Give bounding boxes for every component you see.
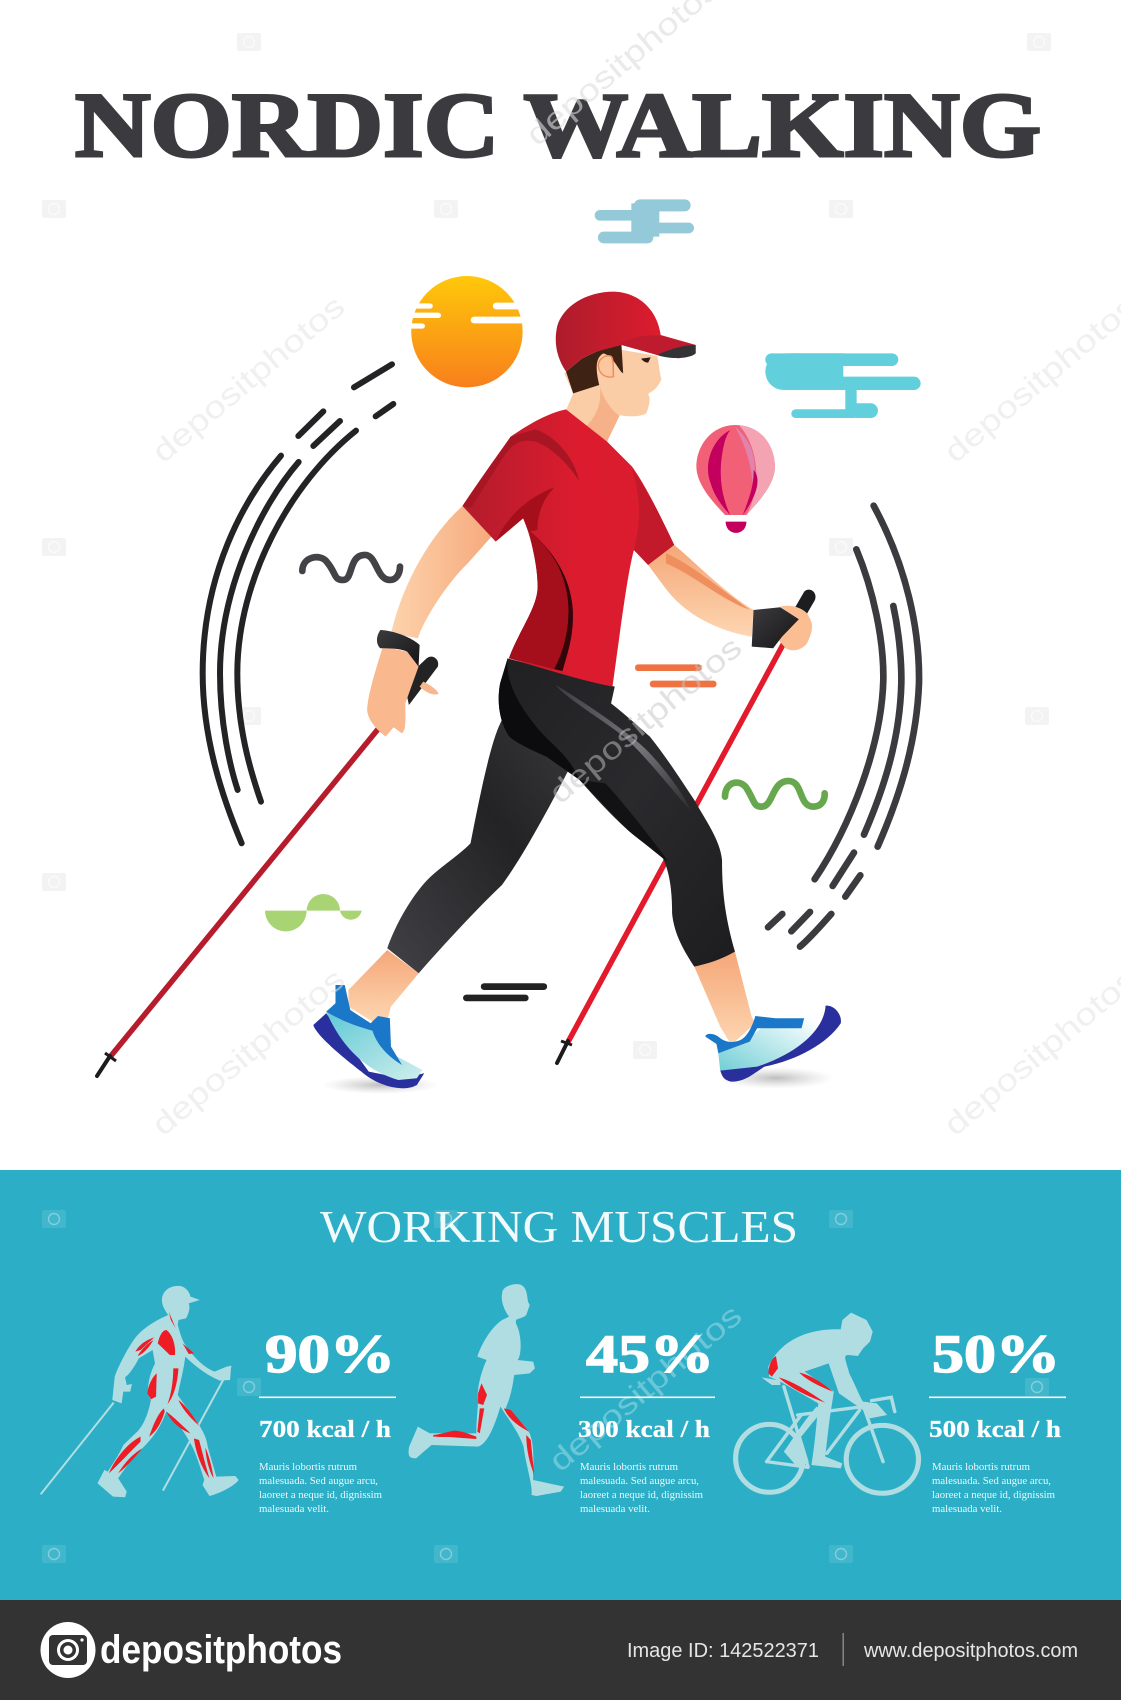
cap visor <box>620 335 696 355</box>
wave green <box>725 781 825 807</box>
watermark on teal: depositphotos <box>542 1297 748 1478</box>
arcs left <box>203 364 393 843</box>
stat: 50%: laoreet a neque id, dignissim <box>932 1490 1055 1501</box>
stat: 90%: laoreet a neque id, dignissim <box>259 1490 382 1501</box>
stat: 50%: malesuada velit. <box>932 1504 1002 1515</box>
stat: 50% <box>929 1324 1066 1515</box>
back arm <box>391 506 493 638</box>
back leg and shoe <box>313 720 569 1088</box>
camera icons on teal <box>42 1210 1049 1563</box>
stat: 90%: malesuada velit. <box>259 1504 329 1515</box>
watermarks: upper area <box>145 0 1121 1142</box>
stat: 50%: malesuada. Sed augue arcu, <box>932 1476 1051 1487</box>
stat: 45%: Mauris lobortis rutrum <box>580 1462 678 1473</box>
watermarks: upper area: depositphotos <box>145 288 351 469</box>
stat: 45%: 45% <box>586 1324 714 1384</box>
watermarks: upper area: depositphotos <box>145 961 351 1142</box>
silhouette: nordic walker <box>41 1286 239 1497</box>
stat: 90%: 90% <box>265 1324 395 1384</box>
front hand <box>779 606 812 650</box>
pole: back <box>97 712 392 1076</box>
upper body <box>367 292 815 737</box>
sun <box>407 276 528 387</box>
website: www.depositphotos.com <box>863 1640 1078 1662</box>
watermarks: upper area: depositphotos <box>937 288 1121 469</box>
pole grip back <box>404 657 438 705</box>
hot air balloon <box>696 425 775 533</box>
shirt <box>462 409 674 687</box>
man figure <box>313 292 841 1088</box>
cloud: right large <box>765 353 921 418</box>
logo icon <box>40 1622 96 1678</box>
stat: 90%: malesuada. Sed augue arcu, <box>259 1476 378 1487</box>
stat: 90%: 700 kcal / h <box>259 1417 391 1443</box>
pole: front <box>557 628 792 1063</box>
panel: working muscles <box>0 1170 1121 1601</box>
heading: WORKING MUSCLES <box>320 1202 798 1252</box>
stat: 45%: laoreet a neque id, dignissim <box>580 1490 703 1501</box>
light green half waves <box>265 894 362 931</box>
watermarks: upper area: depositphotos <box>519 0 725 152</box>
arcs right <box>768 506 919 947</box>
watermarks: upper area: depositphotos <box>937 961 1121 1142</box>
front arm <box>648 545 754 637</box>
orange and black speed lines <box>463 664 716 1001</box>
back hand <box>367 647 419 737</box>
front leg and shoe <box>499 658 841 1082</box>
cap <box>556 292 696 372</box>
stat: 45%: 300 kcal / h <box>578 1417 710 1443</box>
silhouette: cyclist <box>736 1313 919 1493</box>
eye <box>641 357 651 363</box>
silhouette: runner <box>409 1284 564 1496</box>
watermarks: upper area: depositphotos <box>542 629 748 810</box>
stat: 45% <box>578 1324 715 1515</box>
camera watermark icons <box>42 33 1051 1059</box>
ear <box>598 356 614 377</box>
hair <box>566 344 623 393</box>
stat: 45%: malesuada velit. <box>580 1504 650 1515</box>
wrist band <box>377 630 420 667</box>
neck and face <box>564 347 661 442</box>
cloud: top small <box>595 199 694 243</box>
stat: 45%: malesuada. Sed augue arcu, <box>580 1476 699 1487</box>
shirt shading <box>462 429 579 507</box>
stat: 90%: Mauris lobortis rutrum <box>259 1462 357 1473</box>
thumb <box>420 682 439 694</box>
stat: 50%: 500 kcal / h <box>929 1417 1061 1443</box>
pole grip front <box>795 590 815 617</box>
wave dark <box>302 555 400 580</box>
logo wordmark: depositphotos <box>100 1628 342 1672</box>
stat: 50%: Mauris lobortis rutrum <box>932 1462 1030 1473</box>
stat: 50%: 50% <box>932 1324 1060 1384</box>
divider <box>842 1633 844 1666</box>
stat: 90% <box>259 1324 396 1515</box>
image id: Image ID: 142522371 <box>627 1640 819 1662</box>
glove <box>752 607 799 648</box>
shoe shadows <box>322 1067 834 1094</box>
footer bar <box>0 1600 1121 1700</box>
title: NORDIC WALKING <box>75 74 1041 176</box>
